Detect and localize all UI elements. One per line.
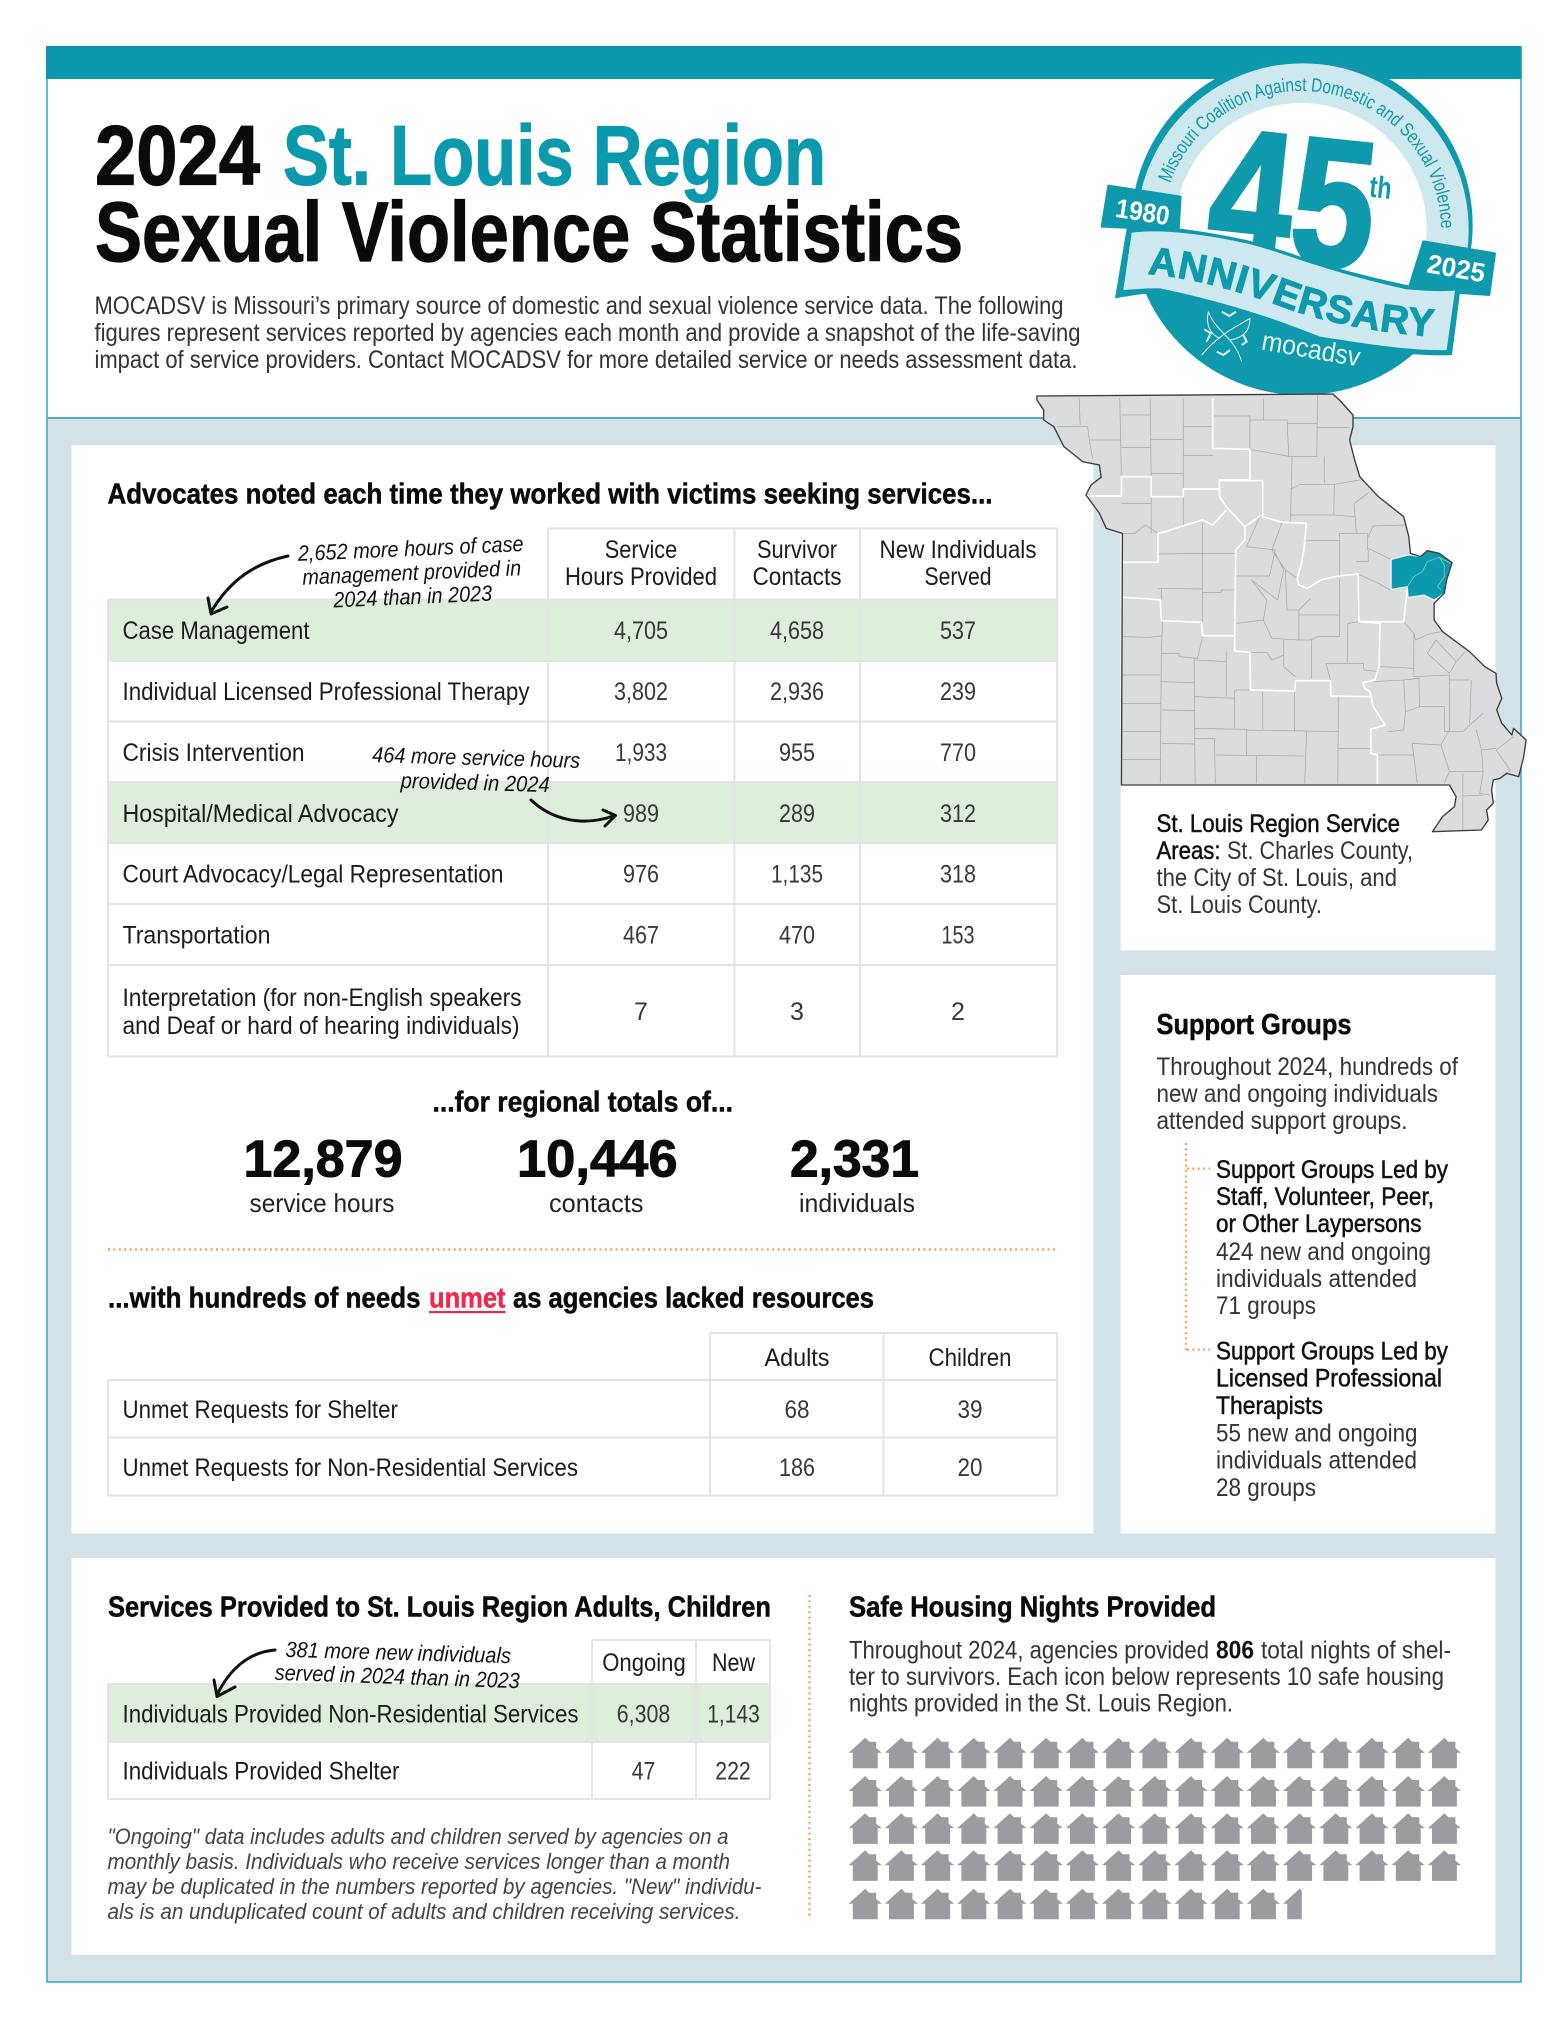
intro paragraph: figures represent services reported by agencies each month and provide a snapshot of the life-saving	[94, 319, 1080, 347]
support group: licensed: 55 new and ongoing	[1216, 1420, 1418, 1448]
map caption: Areas:	[1156, 837, 1220, 865]
map of Missouri	[1037, 394, 1526, 832]
row: non-residential requests: Unmet Requests for Non-Residential Services	[122, 1454, 578, 1482]
service region boundaries	[1086, 398, 1407, 784]
row: transportation: 467	[623, 922, 659, 950]
heading: unmet needs: ...with hundreds of needs	[108, 1282, 420, 1314]
support groups intro: Throughout 2024, hundreds of	[1156, 1053, 1458, 1081]
safe housing text: total nights of shel-	[1261, 1636, 1451, 1664]
mocadsv logo	[1202, 312, 1250, 362]
St. Louis region highlight	[1391, 551, 1452, 600]
title	[95, 108, 963, 279]
intro paragraph	[94, 292, 1080, 374]
state outline	[1037, 394, 1526, 832]
safe housing text: ter to survivors. Each icon below represents 10 safe housing	[849, 1663, 1444, 1691]
support groups intro: attended support groups.	[1156, 1107, 1408, 1135]
row: shelter requests: 68	[784, 1396, 810, 1424]
map caption: St. Louis County.	[1156, 891, 1322, 919]
row: court	[122, 860, 976, 888]
title: 2024	[95, 108, 260, 202]
support group: lay led: 71 groups	[1216, 1292, 1316, 1320]
row: court: Court Advocacy/Legal Representation	[122, 860, 504, 888]
year tab 1980: 1980	[1114, 193, 1172, 231]
badge number 45: 45	[1200, 91, 1386, 309]
top teal bar	[46, 46, 1522, 79]
footnote: may be duplicated in the numbers reported by agencies. "New" individu-	[108, 1874, 762, 1899]
row: shelter	[122, 1758, 751, 1786]
year tab 2025: 2025	[1425, 249, 1488, 288]
row: crisis: Crisis Intervention	[122, 739, 304, 767]
logo wordmark: mocadsv	[1260, 325, 1363, 373]
stat: contacts	[517, 1130, 678, 1218]
support group: licensed	[1216, 1338, 1448, 1502]
arrow: to hospital hours	[531, 800, 616, 826]
arrow: to case management	[208, 556, 288, 614]
annotation: new individuals	[274, 1637, 521, 1693]
row: interpretation	[122, 984, 965, 1040]
row: interpretation: 7	[634, 998, 648, 1026]
heading: services to adults and children: Services Provided to St. Louis Region Adults, Children	[108, 1592, 771, 1624]
row: therapy: 2,936	[770, 678, 824, 706]
row: non-residential: 1,143	[707, 1700, 760, 1728]
heading: unmet needs: unmet	[429, 1282, 506, 1314]
year tab 1980	[1102, 186, 1181, 231]
services provided table	[108, 1640, 770, 1799]
column headers: Served	[924, 563, 992, 591]
support group: licensed: Support Groups Led by	[1216, 1338, 1448, 1366]
unmet headers	[764, 1344, 1012, 1372]
annotation: hospital	[372, 742, 581, 797]
row: case management: Case Management	[122, 617, 310, 645]
heading: unmet needs	[108, 1282, 874, 1314]
safe housing text: 806	[1216, 1636, 1254, 1664]
row: shelter: 47	[632, 1758, 655, 1786]
intro paragraph: MOCADSV is Missouri’s primary source of domestic and sexual violence service data. The following	[94, 292, 1064, 320]
badge superscript: th	[1368, 170, 1393, 206]
row: non-residential requests: 186	[779, 1454, 815, 1482]
stat: individuals	[790, 1130, 919, 1218]
row: court: 318	[940, 860, 976, 888]
support groups intro	[1156, 1053, 1458, 1135]
safe housing text: nights provided in the St. Louis Region.	[849, 1690, 1233, 1718]
stat: service hours: service hours	[250, 1188, 394, 1218]
heading: support groups: Support Groups	[1156, 1009, 1352, 1041]
row: interpretation: and Deaf or hard of hearing individuals)	[122, 1012, 520, 1040]
row: hospital: 312	[940, 800, 976, 828]
lower teal area	[1144, 288, 1441, 395]
row: court: 976	[623, 860, 659, 888]
row: case management: 4,705	[614, 617, 668, 645]
column headers	[565, 536, 1036, 591]
panel: service areas	[1120, 445, 1496, 950]
row: non-residential: 6,308	[617, 1700, 670, 1728]
row: crisis: 770	[940, 739, 976, 767]
row: hospital	[122, 800, 976, 828]
row: shelter requests: Unmet Requests for Shelter	[122, 1396, 398, 1424]
support group: lay led: Staff, Volunteer, Peer,	[1216, 1183, 1434, 1211]
column headers: Hours Provided	[565, 563, 717, 591]
services headers	[602, 1649, 756, 1677]
annotation: case management: 2024 than in 2023	[332, 581, 493, 613]
anniversary badge	[1100, 63, 1496, 394]
support group: lay led: individuals attended	[1216, 1265, 1417, 1293]
annotation: new individuals: served in 2024 than in 2023	[274, 1660, 521, 1693]
badge arc text: Missouri Coalition Against Domestic and Sexual Violence	[1158, 78, 1452, 228]
support group: licensed: Therapists	[1216, 1392, 1323, 1420]
row: court: 1,135	[771, 860, 823, 888]
map caption: St. Charles County,	[1227, 837, 1413, 865]
support group: lay led: or Other Laypersons	[1216, 1210, 1422, 1238]
row: crisis	[122, 739, 976, 767]
row: transportation: 470	[779, 922, 815, 950]
intro paragraph: impact of service providers. Contact MOCADSV for more detailed service or needs assessment data.	[94, 346, 1078, 374]
row: therapy: Individual Licensed Professional Therapy	[122, 678, 530, 706]
row: non-residential: Individuals Provided Non-Residential Services	[122, 1700, 578, 1728]
support group: lay led: Support Groups Led by	[1216, 1156, 1448, 1184]
title: Sexual Violence Statistics	[95, 185, 963, 279]
row: interpretation: 3	[790, 998, 804, 1026]
heading: advocates: Advocates noted each time they worked with victims seeking services...	[108, 478, 992, 510]
panel: support groups	[1120, 975, 1496, 1534]
support groups intro: new and ongoing individuals	[1156, 1080, 1438, 1108]
support group: licensed: 28 groups	[1216, 1474, 1316, 1502]
annotation: case management: 2,652 more hours of case	[296, 531, 524, 566]
stat: individuals: individuals	[799, 1188, 915, 1218]
stat: contacts: contacts	[549, 1188, 644, 1218]
row: interpretation: Interpretation (for non-English speakers	[122, 984, 522, 1012]
column headers: Survivor	[757, 536, 837, 564]
column headers: Contacts	[752, 563, 842, 591]
row: crisis: 1,933	[615, 739, 667, 767]
safe housing text	[849, 1636, 1451, 1718]
services headers: New	[712, 1649, 756, 1677]
annotation: case management: management provided in	[302, 555, 522, 590]
row: crisis: 955	[779, 739, 815, 767]
row: transportation	[122, 922, 974, 950]
row: hospital: Hospital/Medical Advocacy	[122, 800, 399, 828]
row: interpretation: 2	[951, 998, 965, 1026]
row: shelter: Individuals Provided Shelter	[122, 1758, 400, 1786]
support group: licensed: individuals attended	[1216, 1446, 1417, 1474]
row: shelter requests	[122, 1396, 982, 1424]
heading: unmet needs: as agencies lacked resources	[513, 1282, 874, 1314]
county lines	[1057, 395, 1514, 830]
row: therapy	[122, 678, 976, 706]
annotation: hospital: provided in 2024	[399, 768, 550, 797]
row: therapy: 3,802	[614, 678, 668, 706]
row: hospital: 989	[623, 800, 659, 828]
services table	[108, 528, 1057, 1056]
stat: service hours: 12,879	[244, 1130, 402, 1188]
footnote: als is an unduplicated count of adults and children receiving services.	[108, 1899, 740, 1924]
support group: lay led: 424 new and ongoing	[1216, 1238, 1431, 1266]
panel: services	[72, 445, 1094, 1534]
stat: individuals: 2,331	[790, 1130, 919, 1188]
column headers: Service	[605, 536, 677, 564]
row: non-residential requests: 20	[958, 1454, 982, 1482]
panel: bottom	[72, 1558, 1496, 1955]
safe housing text: Throughout 2024, agencies provided	[849, 1636, 1209, 1664]
year tab 2025	[1408, 241, 1495, 295]
house icons: 806 nights	[849, 1738, 1461, 1919]
annotation: new individuals: 381 more new individuals	[285, 1637, 511, 1668]
unmet headers: Children	[928, 1344, 1012, 1372]
row: case management: 537	[940, 617, 976, 645]
footnote: "Ongoing" data includes adults and children served by agencies on a	[108, 1824, 728, 1849]
map caption	[1156, 810, 1413, 919]
row: shelter: 222	[715, 1758, 751, 1786]
footnote: monthly basis. Individuals who receive services longer than a month	[108, 1849, 730, 1874]
annotation: hospital: 464 more service hours	[372, 742, 581, 773]
annotation: case management	[296, 531, 524, 613]
title: St. Louis Region	[283, 108, 826, 202]
support group: lay led	[1216, 1156, 1448, 1320]
column headers: New Individuals	[880, 536, 1036, 564]
stat: service hours	[244, 1130, 402, 1218]
row: non-residential requests	[122, 1454, 982, 1482]
footnote	[108, 1824, 762, 1924]
row: shelter requests: 39	[958, 1396, 982, 1424]
map caption: the City of St. Louis, and	[1156, 864, 1397, 892]
row: therapy: 239	[940, 678, 976, 706]
heading: safe housing: Safe Housing Nights Provided	[849, 1592, 1216, 1624]
row: hospital: 289	[779, 800, 815, 828]
stat: contacts: 10,446	[517, 1130, 678, 1188]
map caption: St. Louis Region Service	[1156, 810, 1400, 838]
row: case management	[122, 617, 976, 645]
unmet headers: Adults	[764, 1344, 830, 1372]
row: transportation: Transportation	[122, 922, 270, 950]
services headers: Ongoing	[602, 1649, 686, 1677]
support group: licensed: Licensed Professional	[1216, 1364, 1442, 1392]
row: case management: 4,658	[770, 617, 824, 645]
unmet needs table	[108, 1333, 1057, 1496]
arrow: to non-residential	[214, 1650, 275, 1696]
row: transportation: 153	[942, 922, 974, 950]
ribbon: ANNIVERSARY	[1148, 248, 1436, 336]
heading: regional totals: ...for regional totals of...	[432, 1086, 733, 1118]
